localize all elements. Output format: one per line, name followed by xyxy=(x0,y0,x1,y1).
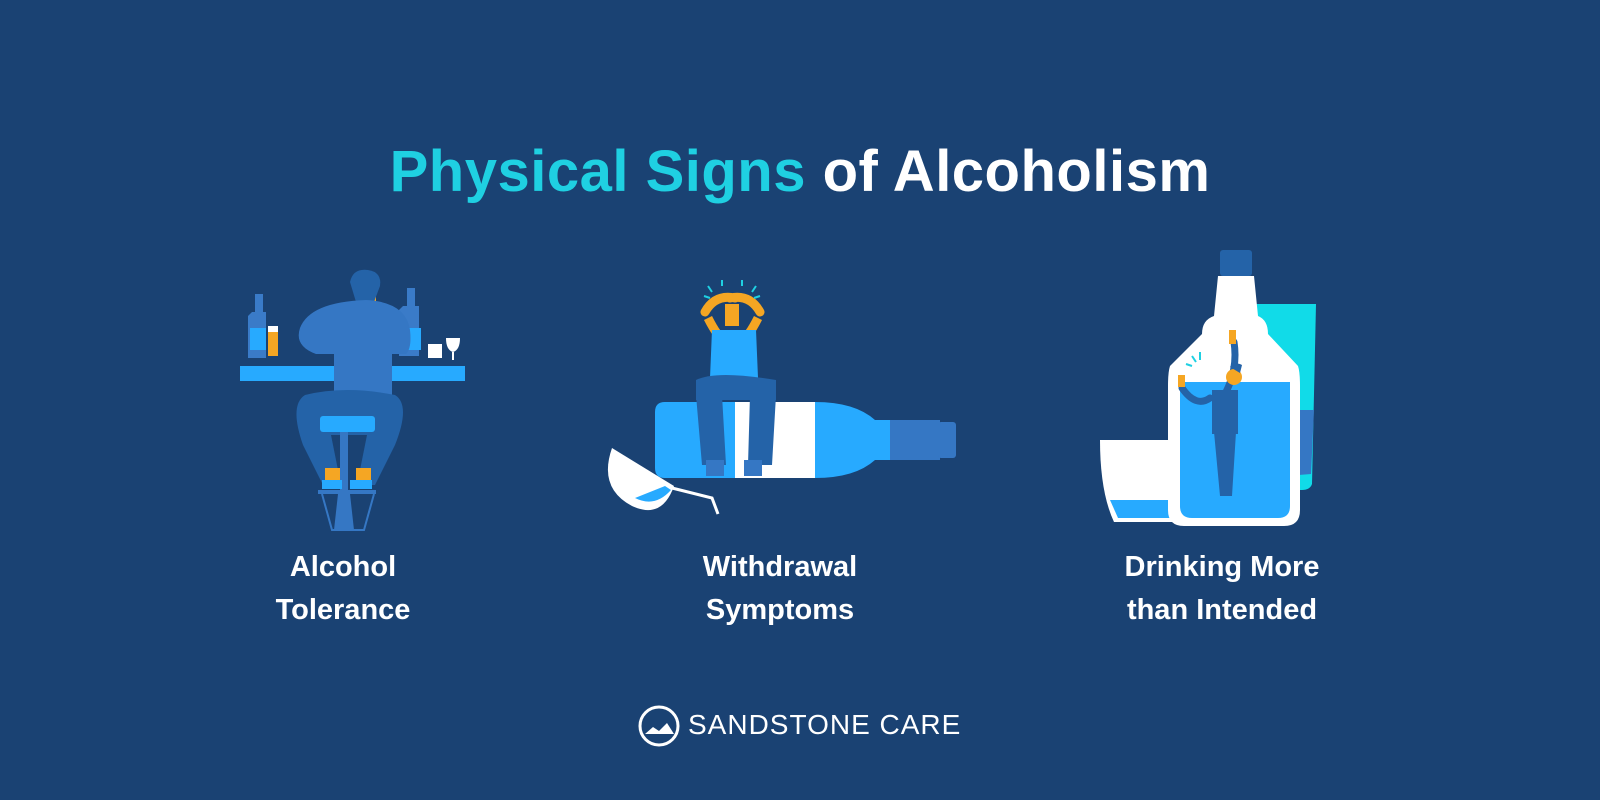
bar counter xyxy=(240,366,465,381)
logo text: SANDSTONE CARE xyxy=(688,709,961,740)
label: alcohol tolerance: Alcohol xyxy=(290,551,396,583)
title: Physical Signs of Alcoholism xyxy=(390,139,1210,204)
label: drinking more than intended: than Intended xyxy=(1127,594,1317,626)
icon: bottle right and glasses xyxy=(399,288,460,360)
drowning man xyxy=(1178,330,1242,496)
icon: cyan glass xyxy=(1228,304,1316,490)
icon: spilled wine glass xyxy=(608,448,718,514)
label: withdrawal symptoms: Withdrawal xyxy=(703,551,857,583)
label: alcohol tolerance: Tolerance xyxy=(276,594,410,626)
illustration: withdrawal man on bottle xyxy=(608,280,956,514)
man body xyxy=(296,270,410,530)
label: alcohol tolerance xyxy=(276,551,410,626)
logo icon xyxy=(640,707,678,745)
illustration: man drowning in bottle xyxy=(1100,250,1316,526)
icon: short glass xyxy=(1100,440,1180,522)
icon: bottle xyxy=(1168,276,1300,526)
icon: bottles left xyxy=(248,294,278,358)
label: withdrawal symptoms xyxy=(702,551,857,626)
label: withdrawal symptoms: Symptoms xyxy=(706,594,854,626)
label: drinking more than intended: Drinking More xyxy=(1125,551,1319,583)
label: drinking more than intended xyxy=(1125,551,1319,626)
man holding head xyxy=(696,280,776,476)
icon: wine bottle lying xyxy=(655,402,956,478)
illustration: man at bar xyxy=(240,270,465,530)
